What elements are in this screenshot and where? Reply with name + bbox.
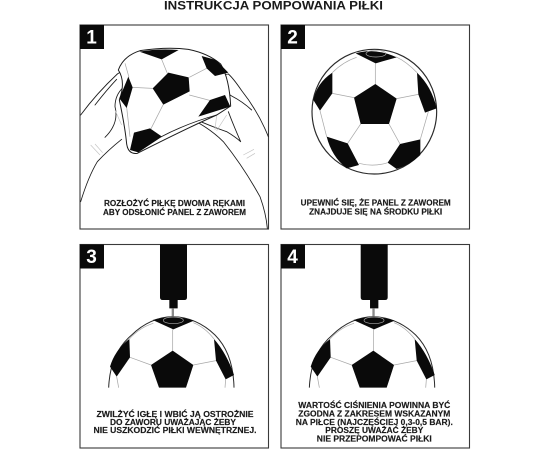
badge: number 1: 1 [86, 28, 97, 48]
caption: ZGODNA Z ZAKRESEM WSKAZANYM [298, 410, 451, 418]
caption: ZWILŻYĆ IGŁĘ I WBIĆ JĄ OSTROŻNIE [96, 410, 254, 419]
panel: step 1 [80, 25, 268, 229]
illustration: pump needle in ball [309, 244, 435, 388]
caption: PROSZĘ UWAŻAĆ ŻEBY [325, 426, 424, 435]
caption [103, 199, 246, 217]
illustration: hands unfolding the ball [81, 48, 268, 228]
badge: number 3 [80, 244, 104, 268]
right hand [198, 74, 268, 228]
caption: NIE PRZEPOMPOWAĆ PIŁKI [317, 434, 432, 444]
caption: ROZŁOŻYĆ PIŁKĘ DWOMA RĘKAMI [104, 199, 245, 208]
pump [361, 244, 388, 318]
illustration: full football [312, 49, 437, 174]
badge: number 2: 2 [287, 28, 298, 48]
caption [301, 198, 451, 216]
caption: WARTOŚĆ CIŚNIENIA POWINNA BYĆ [298, 401, 451, 410]
caption: NIE USZKODZIĆ PIŁKI WEWNĘTRZNEJ. [94, 426, 256, 435]
illustration: pump needle above ball [109, 244, 234, 388]
caption [296, 401, 453, 444]
caption: ABY ODSŁONIĆ PANEL Z ZAWOREM [103, 208, 246, 217]
ball top half [109, 317, 234, 388]
caption: UPEWNIĆ SIĘ, ŻE PANEL Z ZAWOREM [301, 198, 451, 208]
ball folded [118, 48, 231, 153]
caption: DO ZAWORU UWAŻAJĄC ŻEBY [110, 418, 237, 427]
badge: number 2 [281, 25, 305, 49]
panel: step 4 [281, 244, 470, 448]
badge: number 1 [80, 25, 104, 49]
caption: NA PIŁCE (NAJCZĘŚCIEJ 0,3-0,5 BAR). [296, 418, 453, 427]
caption [94, 410, 256, 435]
badge: number 3: 3 [86, 247, 97, 268]
badge: number 4 [281, 244, 305, 268]
left hand [81, 72, 128, 202]
panel: step 3 [80, 244, 268, 448]
ball top half [309, 317, 435, 388]
pump [160, 244, 187, 318]
badge: number 4: 4 [287, 247, 298, 268]
panel: step 2 [281, 25, 470, 229]
caption: ZNAJDUJE SIĘ NA ŚRODKU PIŁKI [309, 208, 442, 216]
